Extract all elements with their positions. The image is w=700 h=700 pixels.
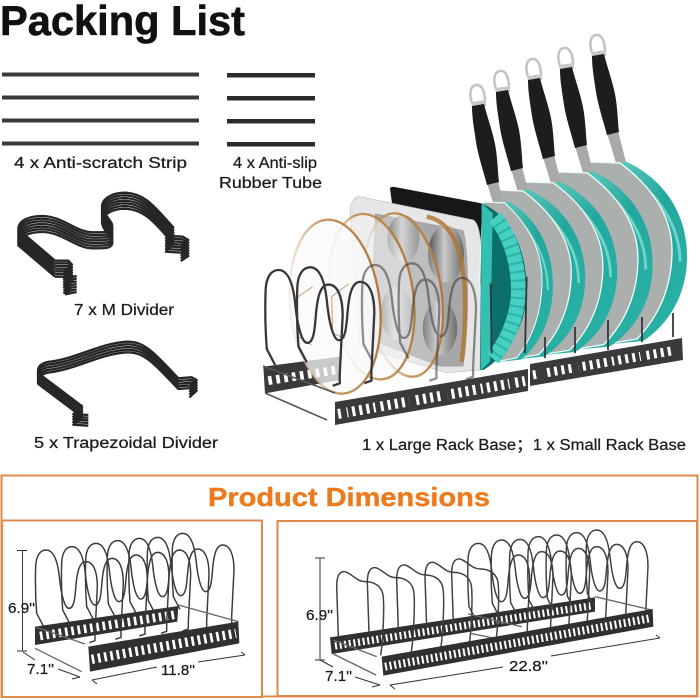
small rack base rail <box>530 338 683 386</box>
side rails <box>263 366 335 420</box>
pans <box>470 35 687 363</box>
side bars <box>333 597 652 675</box>
pan 1 <box>470 85 553 363</box>
panel: product dimensions header frame <box>2 476 698 696</box>
dividers <box>35 533 234 643</box>
pan 2 <box>490 71 585 360</box>
label: depth 7.1: 7.1'' <box>27 661 54 678</box>
label: height 6.9: 6.9'' <box>306 607 333 624</box>
back rail <box>263 357 340 393</box>
back rail <box>35 606 178 645</box>
heading: product dimensions: Product Dimensions <box>208 482 490 512</box>
wire legs between pans <box>545 313 673 358</box>
dimension lines <box>17 550 245 684</box>
small rack drawing <box>35 533 239 672</box>
back rail <box>330 597 595 654</box>
pan 4 <box>553 48 653 350</box>
icon: stacked M dividers <box>18 193 188 294</box>
label: anti-slip rubber tube: 4 x Anti-slip <box>233 155 317 172</box>
anti-scratch strips <box>2 72 199 146</box>
extended rack drawing <box>330 530 653 676</box>
lid handle <box>297 284 348 345</box>
front rail <box>88 622 239 672</box>
label: depth 7.1: 7.1'' <box>325 668 352 685</box>
black tray <box>390 187 482 370</box>
trays and lids <box>263 187 482 398</box>
glass lid 1 <box>281 215 389 398</box>
wire dividers <box>265 263 527 386</box>
glass lid 3 <box>354 208 453 382</box>
pan 3 <box>520 59 617 356</box>
label: anti-scratch strip: 4 x Anti-scratch Strip <box>14 155 187 172</box>
label: anti-slip rubber tube: Rubber Tube <box>219 175 322 192</box>
teal tart pan <box>480 203 527 371</box>
label: M divider: 7 x M Divider <box>74 302 174 319</box>
panel: extended rack dimensions <box>278 521 697 696</box>
glass lid 2 <box>319 208 425 385</box>
rubber tubes <box>227 73 315 146</box>
label: rack bases: 1 x Large Rack Base；1 x Small Rack Base <box>362 437 686 454</box>
silver tray <box>350 197 482 373</box>
label: trapezoidal divider: 5 x Trapezoidal Divider <box>34 435 218 452</box>
dividers <box>337 530 648 655</box>
label: anti-slip rubber tube <box>219 155 322 192</box>
side bars <box>35 605 238 672</box>
photo: rack loaded with lids, trays and pans <box>263 35 687 425</box>
label: height 6.9: 6.9'' <box>8 600 35 617</box>
label: width 11.8: 11.8'' <box>161 662 195 679</box>
large rack base rail <box>335 369 528 425</box>
pan 5 <box>585 35 687 345</box>
label: length 22.8: 22.8'' <box>509 658 548 675</box>
icon: stacked trapezoidal dividers <box>38 342 197 426</box>
dimension lines <box>315 558 660 689</box>
front rail <box>382 609 653 676</box>
panel: small rack dimensions <box>2 520 262 697</box>
